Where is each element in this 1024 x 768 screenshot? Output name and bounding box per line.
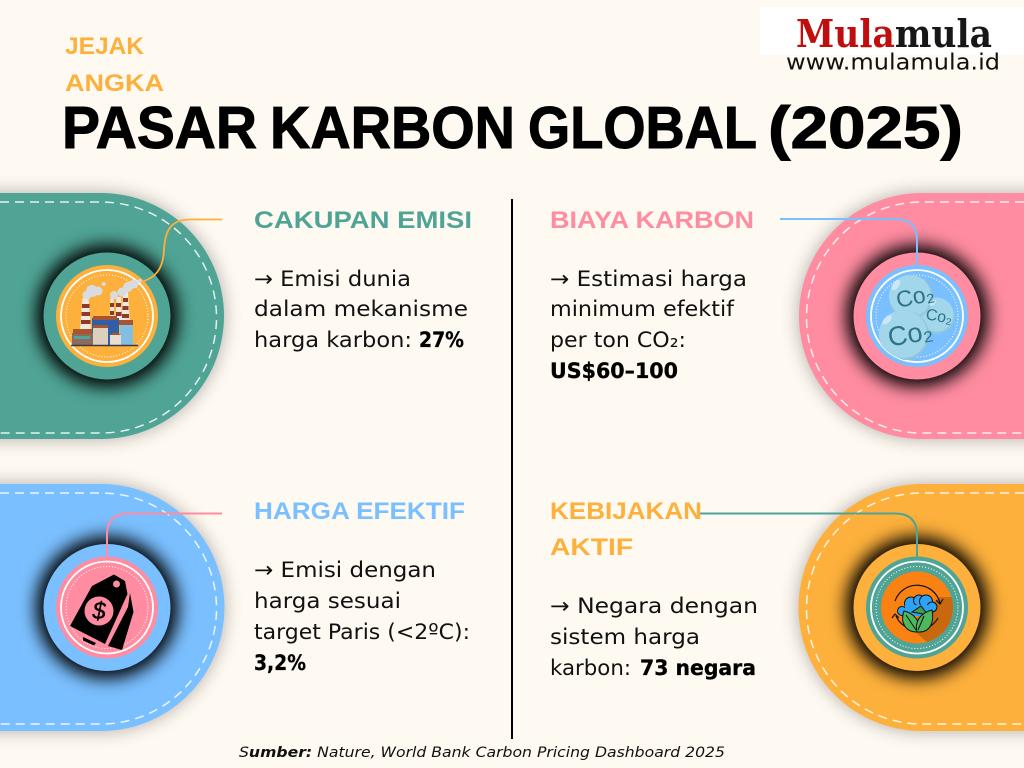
text: harga efektif: target Paris (<2ºC): bbox=[254, 620, 470, 645]
title: (2025) bbox=[768, 95, 963, 161]
text: biaya karbon bbox=[550, 267, 747, 383]
icon: price tag: $ bbox=[91, 598, 106, 625]
panel: harga efektif bbox=[0, 484, 224, 731]
kicker: Jejak Angka: JEJAK bbox=[65, 33, 145, 60]
text: cakupan emisi bbox=[254, 267, 468, 353]
kicker: Jejak Angka bbox=[65, 33, 164, 97]
panel: cakupan emisi bbox=[0, 193, 224, 439]
heading: kebijakan aktif bbox=[550, 498, 702, 561]
icon: price tag bbox=[56, 556, 158, 658]
connector: blue line bbox=[780, 219, 917, 266]
panel: kebijakan aktif bbox=[700, 484, 1024, 731]
icon: CO2 bubbles bbox=[866, 265, 968, 367]
source note: Sumber: Nature, World Bank Carbon Pricing Dashboard 2025 bbox=[239, 745, 725, 761]
text: biaya karbon: → Estimasi harga bbox=[550, 267, 747, 292]
text: cakupan emisi: → Emisi dunia bbox=[254, 267, 411, 292]
heading: kebijakan aktif: AKTIF bbox=[550, 534, 633, 561]
text: biaya karbon: US$60–100 bbox=[550, 359, 678, 383]
connector: teal line bbox=[700, 514, 917, 558]
logo: Mulamula bbox=[796, 11, 992, 56]
text: cakupan emisi: dalam mekanisme bbox=[254, 297, 468, 322]
connector: pink line bbox=[107, 514, 222, 558]
text: biaya karbon: per ton CO₂: bbox=[550, 328, 686, 353]
logo bbox=[760, 7, 1024, 76]
text: kebijakan aktif bbox=[550, 594, 758, 681]
title: KARBON bbox=[270, 95, 515, 161]
text: cakupan emisi: 27% bbox=[419, 328, 464, 352]
panel: biaya karbon bbox=[780, 193, 1024, 439]
text: cakupan emisi: harga karbon: bbox=[254, 328, 412, 353]
text: kebijakan aktif: 73 negara bbox=[640, 656, 756, 680]
kicker: Jejak Angka: ANGKA bbox=[65, 70, 164, 97]
text: kebijakan aktif: karbon: bbox=[550, 656, 631, 681]
heading: harga efektif: HARGA EFEKTIF bbox=[254, 498, 465, 525]
icon: CO2 bubbles: Co₂ bbox=[894, 279, 937, 313]
heading: biaya karbon: BIAYA KARBON bbox=[550, 207, 754, 234]
text: kebijakan aktif: sistem harga bbox=[550, 625, 700, 650]
icon: CO2 bubbles: Co₂ bbox=[885, 315, 935, 353]
logo: www.mulamula.id bbox=[786, 50, 1000, 76]
text: harga efektif bbox=[254, 558, 470, 675]
icon: CO2 bubbles: Co₂ bbox=[924, 306, 954, 328]
title: GLOBAL bbox=[528, 95, 757, 161]
title: PASAR bbox=[62, 95, 257, 161]
text: harga efektif: harga sesuai bbox=[254, 589, 401, 614]
connector: orange line bbox=[141, 220, 222, 282]
text: biaya karbon: minimum efektif bbox=[550, 297, 734, 322]
text: harga efektif: 3,2% bbox=[254, 651, 306, 675]
icon: cloud and leaves bbox=[866, 556, 968, 658]
title bbox=[62, 95, 963, 161]
text: harga efektif: → Emisi dengan bbox=[254, 558, 436, 583]
icon: factory bbox=[56, 265, 158, 367]
heading: cakupan emisi: CAKUPAN EMISI bbox=[254, 207, 472, 234]
heading: kebijakan aktif: KEBIJAKAN bbox=[550, 498, 702, 525]
text: kebijakan aktif: → Negara dengan bbox=[550, 594, 758, 619]
